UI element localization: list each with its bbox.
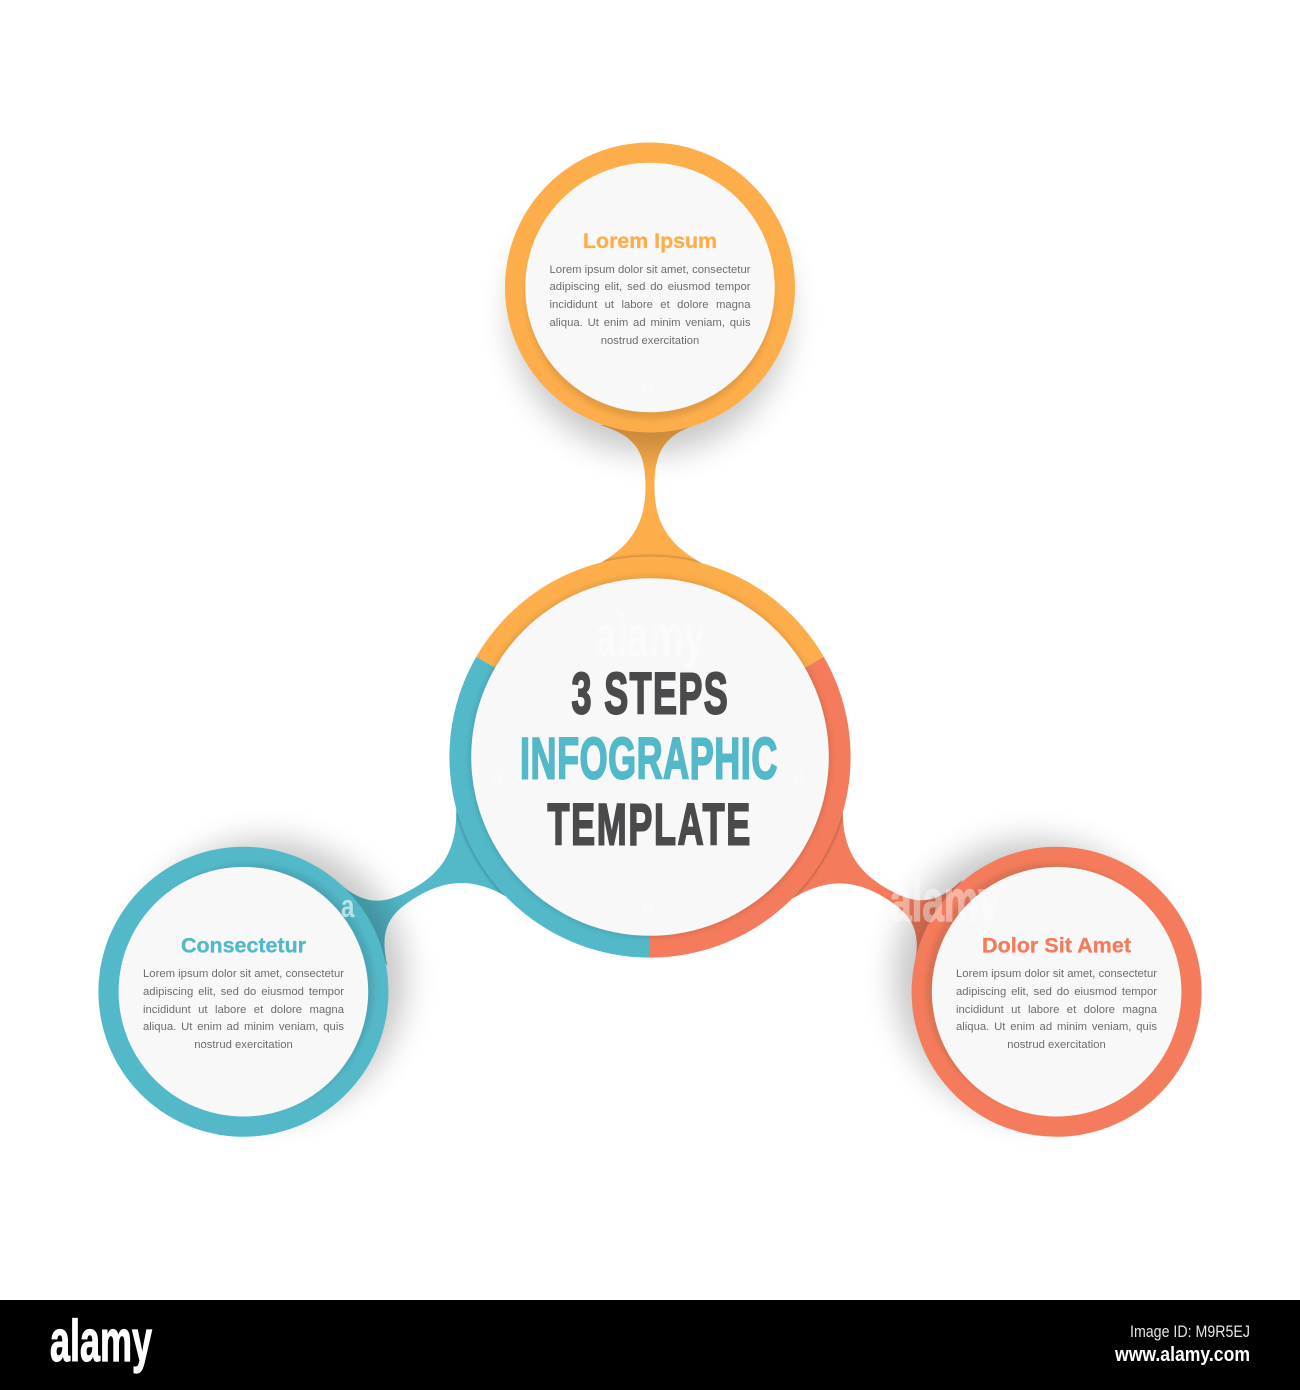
watermarks: a	[642, 893, 655, 918]
body text: teal step: Lorem ipsum dolor sit amet, consectetur	[143, 968, 344, 980]
footer logo: alamy	[50, 1309, 152, 1374]
center title	[520, 662, 777, 858]
heading: Lorem Ipsum: Lorem Ipsum	[583, 230, 717, 253]
step group: teal left connector and circle ring	[98, 808, 506, 1137]
watermarks: a	[642, 374, 655, 399]
watermarks: a	[793, 763, 806, 788]
footer bar	[0, 1300, 1300, 1390]
body text: orange step: incididunt ut labore et dolore magna	[550, 299, 750, 311]
ring: orange circle	[505, 142, 795, 432]
step group: coral right connector and circle ring	[791, 812, 1202, 1137]
body text: coral step: aliqua. Ut enim ad minim veniam, quis	[956, 1021, 1157, 1033]
ring: coral circle	[912, 846, 1202, 1137]
segment: orange	[476, 556, 824, 757]
body text: teal step: incididunt ut labore et dolore magna	[143, 1004, 344, 1016]
body text: coral step: incididunt ut labore et dolore magna	[956, 1004, 1157, 1016]
body text: teal step: aliqua. Ut enim ad minim veniam, quis	[143, 1021, 344, 1033]
watermarks: alamy	[595, 604, 705, 669]
connector: orange	[597, 425, 707, 570]
body text: orange step: Lorem ipsum dolor sit amet, consectetur	[550, 264, 750, 276]
footer url: www.alamy.com	[1114, 1344, 1250, 1366]
center circle	[471, 578, 829, 936]
segment: coral	[650, 657, 851, 958]
body text: orange step	[550, 264, 750, 347]
body text: coral step: Lorem ipsum dolor sit amet, consectetur	[956, 968, 1157, 980]
body text: orange step: aliqua. Ut enim ad minim veniam, quis	[550, 317, 750, 329]
heading: Consectetur: Consectetur	[181, 934, 306, 958]
body text: teal step: adipiscing elit, sed do eiusmod tempor	[143, 986, 344, 998]
inner circle: teal step	[119, 867, 368, 1116]
title line: infographic: INFOGRAPHIC	[520, 727, 777, 792]
shadow: coral circle	[792, 812, 1150, 1128]
shadow: teal circle	[149, 809, 506, 1128]
center ring: three coloured segments	[449, 556, 851, 958]
segment: teal	[449, 657, 650, 958]
connector: coral	[783, 805, 964, 972]
body text: coral step	[956, 968, 1157, 1051]
step group: orange top connector and circle ring	[498, 142, 802, 564]
body text: orange step: adipiscing elit, sed do eiusmod tempor	[550, 281, 750, 293]
body text: orange step: nostrud exercitation	[601, 335, 699, 347]
body text: teal step	[143, 968, 344, 1051]
body text: teal step: nostrud exercitation	[194, 1039, 293, 1051]
inner circle: coral step	[932, 867, 1181, 1116]
watermarks: a	[341, 888, 355, 924]
body text: coral step: nostrud exercitation	[1007, 1039, 1106, 1051]
title line: 3 steps: 3 STEPS	[572, 662, 728, 727]
heading: Dolor Sit Amet: Dolor Sit Amet	[982, 934, 1131, 958]
ring: teal circle	[98, 846, 388, 1137]
title line: template: TEMPLATE	[548, 793, 750, 858]
body text: coral step: adipiscing elit, sed do eiusmod tempor	[956, 986, 1157, 998]
watermarks: alamy	[890, 869, 1000, 934]
shadow: orange circle	[498, 261, 802, 564]
inner circle: orange step	[525, 163, 775, 412]
footer image id: Image ID: M9R5EJ	[1130, 1322, 1250, 1341]
connector: teal	[334, 801, 515, 969]
watermarks: a	[491, 763, 504, 788]
